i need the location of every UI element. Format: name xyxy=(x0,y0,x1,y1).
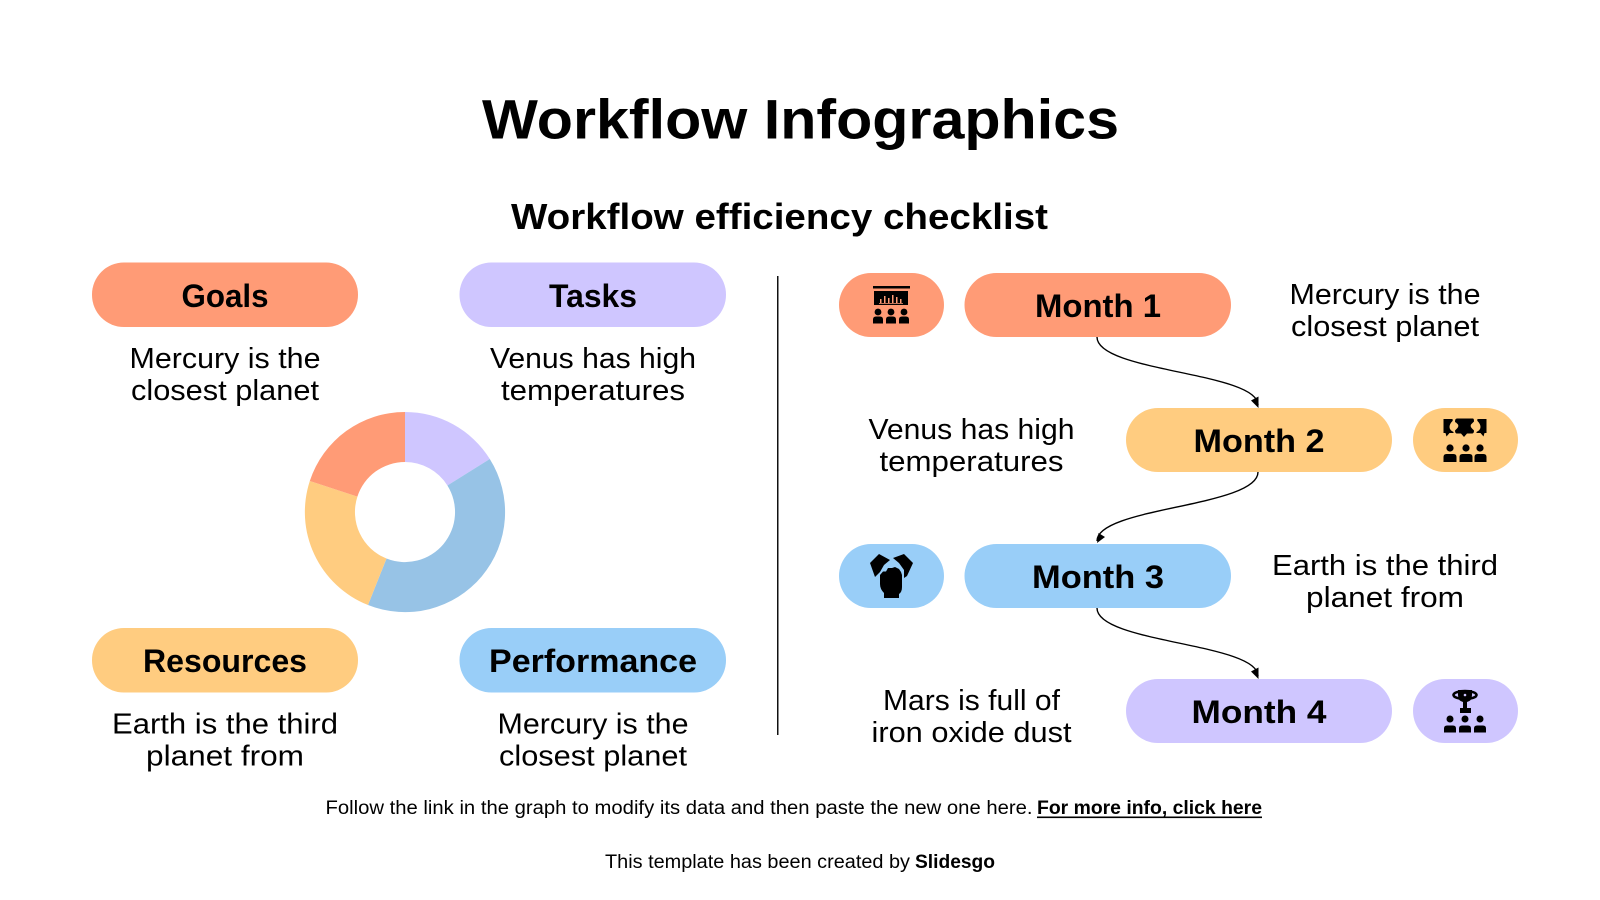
text: Month 3 description xyxy=(1272,550,1498,614)
text: Month 4 description: Mars is full of xyxy=(883,685,1061,717)
pill: Month 4 xyxy=(1126,679,1392,743)
title: Workflow Infographics xyxy=(482,88,1119,150)
credit line: This template has been created by xyxy=(605,852,911,873)
text: Performance description xyxy=(498,708,688,772)
pill: Goals xyxy=(92,262,358,327)
text: Goals description: Mercury is the xyxy=(130,343,320,375)
icon: discussion audience xyxy=(1413,408,1518,472)
pill: Performance xyxy=(460,628,726,692)
text: Tasks description: temperatures xyxy=(501,375,685,407)
credit line: Slidesgo xyxy=(915,852,995,873)
pill: Resources xyxy=(92,628,358,692)
pill: Performance: Performance xyxy=(489,643,697,679)
icon: presentation audience xyxy=(839,273,944,337)
text: Tasks description xyxy=(490,343,696,407)
panel: monthly workflow xyxy=(839,273,1518,749)
donut chart xyxy=(305,412,505,612)
panel: efficiency checklist xyxy=(92,262,726,772)
pill: Tasks: Tasks xyxy=(549,278,637,314)
icon: trophy audience xyxy=(1413,679,1518,743)
pill: Month 3 xyxy=(964,544,1231,608)
text: Performance description: Mercury is the xyxy=(498,708,688,740)
pill: Tasks xyxy=(460,262,726,327)
pill: Month 4: Month 4 xyxy=(1192,694,1327,730)
text: Goals description: closest planet xyxy=(131,375,319,407)
subtitle: Workflow efficiency checklist xyxy=(511,196,1048,237)
pill: Month 1: Month 1 xyxy=(1035,288,1161,324)
text: Performance description: closest planet xyxy=(499,740,687,772)
arrow: Month 3 to Month 4 xyxy=(1097,608,1258,679)
text: Goals description xyxy=(130,343,320,407)
arrow: Month 1 to Month 2 xyxy=(1097,337,1258,408)
text: Resources description xyxy=(112,708,338,772)
text: Month 1 description: Mercury is the xyxy=(1290,279,1480,311)
text: Month 1 description xyxy=(1290,279,1480,343)
text: Resources description: Earth is the third xyxy=(112,708,338,740)
text: Tasks description: Venus has high xyxy=(490,343,696,375)
text: Month 4 description xyxy=(872,685,1072,749)
text: Month 1 description: closest planet xyxy=(1291,311,1479,343)
text: Month 3 description: Earth is the third xyxy=(1272,550,1498,582)
text: Month 2 description: temperatures xyxy=(880,446,1064,478)
text: Month 3 description: planet from xyxy=(1306,582,1464,614)
text: Resources description: planet from xyxy=(146,740,304,772)
icon: team fist xyxy=(839,544,944,608)
pill: Month 3: Month 3 xyxy=(1032,559,1164,595)
footer note with link: Follow the link in the graph to modify its data and then paste the new one here. xyxy=(326,798,1032,819)
text: Month 4 description: iron oxide dust xyxy=(872,717,1072,749)
pill: Goals: Goals xyxy=(182,278,268,314)
pill: Month 1 xyxy=(964,273,1231,337)
footer note with link: For more info, click here xyxy=(1037,798,1262,819)
pill: Resources: Resources xyxy=(143,643,307,679)
pill: Month 2 xyxy=(1126,408,1392,472)
text: Month 2 description xyxy=(868,414,1074,478)
text: Month 2 description: Venus has high xyxy=(868,414,1074,446)
arrow: Month 2 to Month 3 xyxy=(1097,472,1258,543)
pill: Month 2: Month 2 xyxy=(1194,423,1324,459)
